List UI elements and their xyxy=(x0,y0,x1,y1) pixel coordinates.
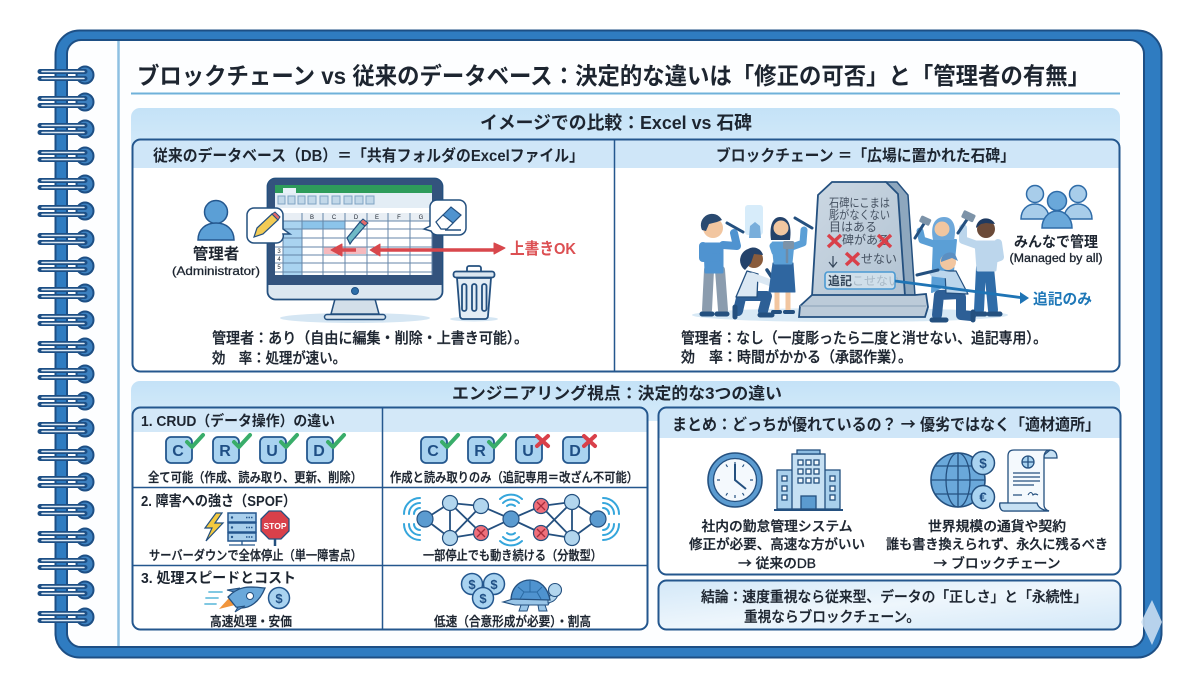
section heading: エンジニアリング視点：決定的な3つの違い xyxy=(452,383,782,403)
icon: stone monument: 目はある xyxy=(829,220,877,234)
icon: stone monument: 追記 xyxy=(828,273,852,288)
callout: eraser xyxy=(424,200,466,235)
arrow: overwrite OK xyxy=(331,239,576,258)
icon: monitor with spreadsheet: E xyxy=(375,215,379,221)
icon: stone monument: 碑がある xyxy=(842,232,890,247)
icon: group managed by all: みんなで管理 xyxy=(1014,233,1098,251)
icon: trash can xyxy=(450,266,498,322)
panel: three differences table xyxy=(132,408,648,630)
icon: monitor with spreadsheet: F xyxy=(397,215,401,221)
icon: stone monument xyxy=(799,182,928,317)
icon: stone monument: 石碑にこまは xyxy=(829,195,890,210)
icon: globe and coins: $ xyxy=(979,456,987,471)
section header band xyxy=(131,381,1120,421)
icon: administrator: (Administrator) xyxy=(172,264,260,278)
icons: coins and turtle xyxy=(462,574,562,611)
icons: CRUD append only: U xyxy=(522,443,534,460)
icon: monitor with spreadsheet: 4 xyxy=(277,257,281,263)
icons: rocket and coin xyxy=(205,587,290,612)
left panel description xyxy=(212,329,528,367)
spiral binding rings xyxy=(40,66,94,626)
panel header band xyxy=(133,140,1119,168)
row 1 right caption: 作成と読み取りのみ（追記専用＝改ざん不可能） xyxy=(390,470,638,485)
diagram: distributed network xyxy=(404,494,619,546)
arrow: append only: 追記のみ xyxy=(1033,290,1092,308)
left panel description: 効 率：処理が速い。 xyxy=(212,349,346,367)
icons: lightning, server, stop sign: STOP xyxy=(264,521,287,531)
icons: lightning, server, stop sign xyxy=(205,511,289,546)
section: engineering viewpoint xyxy=(131,381,1120,630)
title: ブロックチェーン vs 従来のデータベース：決定的な違いは「修正の可否」と「管理者の有無」 xyxy=(137,62,1090,89)
left use case text: → 従来のDB xyxy=(738,552,816,572)
callout: pencil xyxy=(247,208,290,243)
icon: globe and coins: € xyxy=(979,490,987,505)
icon: monitor with spreadsheet: G xyxy=(419,215,424,221)
icons: coins and turtle: $ xyxy=(490,577,498,592)
panel: conclusion: 結論：速度重視なら従来型、データの「正しさ」と「永続性」 xyxy=(701,588,1087,606)
icon: monitor with spreadsheet: 3 xyxy=(277,249,281,255)
panel: summary xyxy=(658,408,1120,574)
icons: CRUD all allowed: C xyxy=(172,443,184,460)
right panel description: 管理者：なし（一度彫ったら二度と消せない、追記専用）。 xyxy=(681,329,1047,347)
icon: monitor with spreadsheet xyxy=(268,178,442,323)
icon: administrator: 管理者 xyxy=(193,244,239,263)
icon: stone monument: せない xyxy=(861,252,897,266)
icons: CRUD all allowed: U xyxy=(266,443,278,460)
right panel description: 効 率：時間がかかる（承認作業）。 xyxy=(681,348,912,366)
icon: monitor with spreadsheet: B xyxy=(310,215,314,221)
left panel description: 管理者：あり（自由に編集・削除・上書き可能）。 xyxy=(212,329,528,347)
row 3 left caption: 高速処理・安価 xyxy=(210,614,292,629)
left panel heading: 従来のデータベース（DB）＝「共有フォルダのExcelファイル」 xyxy=(153,146,584,165)
person: kneeling woman xyxy=(735,247,777,317)
icons: rocket and coin: $ xyxy=(275,591,283,606)
icons: CRUD append only: C xyxy=(427,443,439,460)
right use case text: → ブロックチェーン xyxy=(934,552,1060,572)
icons: CRUD append only: R xyxy=(474,443,486,460)
icons: CRUD append only xyxy=(421,435,595,463)
row 2 right caption: 一部停止でも動き続ける（分散型） xyxy=(423,548,602,563)
icon: stone monument: 彫がなくない xyxy=(829,207,890,222)
decorative sparkle xyxy=(1141,600,1162,645)
panel: conclusion: 重視ならブロックチェーン。 xyxy=(744,608,920,626)
row 3 heading: 3. 処理スピードとコスト xyxy=(141,570,296,587)
panel: conclusion xyxy=(658,580,1120,630)
row 3 right caption: 低速（合意形成が必要）・割高 xyxy=(434,614,591,629)
left use case text: 修正が必要、高速な方がいい xyxy=(689,536,865,552)
icon: monitor with spreadsheet: 5 xyxy=(277,265,281,271)
right panel heading: ブロックチェーン ＝「広場に置かれた石碑」 xyxy=(716,146,1015,165)
right use case text: 誰も書き換えられず、永久に残るべき xyxy=(886,536,1108,552)
summary heading: まとめ：どっちが優れているの？ → 優劣ではなく「適材適所」 xyxy=(672,411,1100,435)
section heading: イメージでの比較：Excel vs 石碑 xyxy=(480,113,752,133)
person: man with hammer xyxy=(958,210,1000,314)
right panel description xyxy=(681,329,1047,366)
icons: CRUD all allowed xyxy=(166,435,344,463)
right use case text xyxy=(886,518,1108,572)
panel outline xyxy=(132,140,1120,372)
icons: coins and turtle: $ xyxy=(468,577,476,592)
icon: contract scroll xyxy=(1000,450,1057,511)
person: kneeling man xyxy=(917,252,973,320)
icon: group managed by all: (Managed by all) xyxy=(1010,253,1103,265)
comparison panel xyxy=(132,140,1120,372)
section header band xyxy=(131,108,1120,153)
icon: administrator xyxy=(172,200,260,278)
icon: monitor with spreadsheet: D xyxy=(354,215,359,221)
icon: office building xyxy=(774,450,843,510)
icons: CRUD all allowed: R xyxy=(219,443,231,460)
row 2 heading: 2. 障害への強さ（SPOF） xyxy=(141,493,296,510)
left use case text xyxy=(689,518,865,572)
person: standing woman xyxy=(769,217,812,312)
row 1 left caption: 全て可能（作成、読み取り、更新、削除） xyxy=(148,470,362,485)
left use case text: 社内の勤怠管理システム xyxy=(702,518,852,534)
person: woman with hammer xyxy=(915,215,956,292)
icon: group managed by all xyxy=(1010,186,1103,265)
icon: stone monument: こせない xyxy=(852,274,900,288)
ground shadow xyxy=(692,308,1008,322)
icon: globe and coins xyxy=(931,452,994,508)
stone chip xyxy=(745,205,763,238)
row 2 left caption: サーバーダウンで全体停止（単一障害点） xyxy=(149,548,362,563)
icons: CRUD all allowed: D xyxy=(313,443,325,460)
icons: CRUD append only: D xyxy=(569,443,581,460)
person: man with chisel xyxy=(701,214,743,314)
icons: coins and turtle: $ xyxy=(479,591,487,606)
icon: monitor with spreadsheet: C xyxy=(332,215,337,221)
arrow: append only xyxy=(895,281,1092,308)
right use case text: 世界規模の通貨や契約 xyxy=(928,518,1066,534)
icon: clock xyxy=(708,453,762,507)
section: image comparison xyxy=(131,108,1120,372)
arrow: overwrite OK: 上書きOK xyxy=(510,239,576,258)
row 1 heading: 1. CRUD（データ操作）の違い xyxy=(141,412,335,430)
